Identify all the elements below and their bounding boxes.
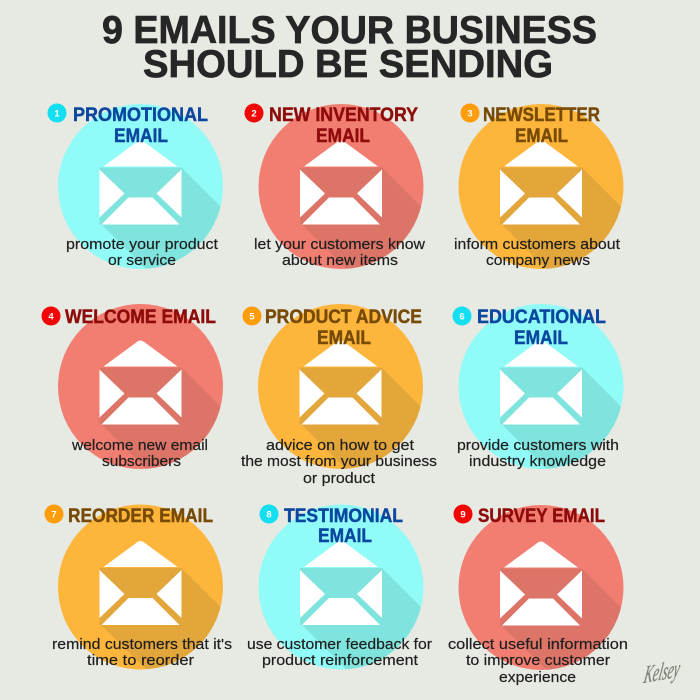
description <box>52 636 232 669</box>
badge 8 <box>260 504 278 524</box>
title: SHOULD BE SENDING <box>143 43 553 86</box>
icon: envelope on cyan circle <box>258 504 424 670</box>
description: inform customers about <box>454 236 621 253</box>
badge 3: 3 <box>467 108 473 120</box>
panel: newsletter email <box>454 104 624 269</box>
description: or service <box>108 252 176 269</box>
icon: envelope on orange circle <box>258 304 423 469</box>
badge 9 <box>454 504 472 524</box>
panel: testimonial email <box>248 504 432 670</box>
icon: envelope on red circle <box>458 505 624 670</box>
description <box>457 437 619 470</box>
icon: envelope on orange circle <box>458 104 624 269</box>
description: subscribers <box>102 453 181 470</box>
panel: educational email <box>452 304 624 470</box>
badge 9: 9 <box>460 510 466 520</box>
heading: NEW INVENTORY <box>269 104 418 126</box>
description: experience <box>499 669 576 686</box>
heading: EMAIL <box>515 125 568 147</box>
description <box>71 437 208 470</box>
description: product reinforcement <box>262 652 419 669</box>
description: company news <box>486 252 590 269</box>
description: collect useful information <box>448 636 628 653</box>
description: promote your product <box>66 236 219 253</box>
heading: EMAIL <box>317 327 371 349</box>
badge 5: 5 <box>249 312 255 322</box>
panel: reorder email <box>44 504 232 670</box>
heading: WELCOME EMAIL <box>65 306 216 328</box>
heading <box>73 104 208 147</box>
description: let your customers know <box>254 236 425 253</box>
icon: envelope on cyan circle <box>458 304 624 469</box>
description: industry knowledge <box>469 453 606 470</box>
description <box>254 236 425 269</box>
title <box>102 9 597 86</box>
description: about new items <box>282 252 398 269</box>
badge 8: 8 <box>266 510 272 520</box>
heading: REORDER EMAIL <box>68 505 213 527</box>
heading: EDUCATIONAL <box>477 306 606 328</box>
heading: EMAIL <box>114 125 168 147</box>
description: to improve customer <box>466 652 610 669</box>
heading <box>477 306 606 349</box>
heading: PROMOTIONAL <box>73 104 208 126</box>
badge 1: 1 <box>54 108 60 120</box>
icon: envelope on red circle <box>258 104 424 269</box>
badge 2: 2 <box>251 108 257 120</box>
heading: EMAIL <box>316 125 370 147</box>
description: remind customers that it's <box>52 636 232 653</box>
heading: EMAIL <box>514 327 568 349</box>
heading: TESTIMONIAL <box>284 505 403 527</box>
heading: SURVEY EMAIL <box>478 505 605 527</box>
badge 4: 4 <box>48 312 54 322</box>
badge 7 <box>44 504 64 524</box>
title: 9 EMAILS YOUR BUSINESS <box>102 9 597 52</box>
heading: NEWSLETTER <box>483 104 600 126</box>
icon: envelope on orange circle <box>58 504 223 670</box>
badge 5 <box>242 306 262 326</box>
badge 4 <box>42 306 60 326</box>
panel: product advice email <box>241 304 436 486</box>
description: or product <box>303 470 376 487</box>
heading <box>483 104 600 147</box>
badge 2 <box>244 104 264 122</box>
description <box>247 636 432 669</box>
description <box>241 437 437 487</box>
panel: promotional email <box>48 104 223 269</box>
heading: EMAIL <box>318 525 372 547</box>
heading: PRODUCT ADVICE <box>265 306 422 328</box>
description <box>454 236 621 269</box>
panel: survey email <box>448 504 627 686</box>
panel: new inventory email <box>244 104 426 269</box>
description: time to reorder <box>87 652 194 669</box>
badge 7: 7 <box>51 510 57 520</box>
description <box>448 636 628 686</box>
description <box>66 236 219 269</box>
description: provide customers with <box>457 437 619 454</box>
description: welcome new email <box>71 437 208 454</box>
badge 6: 6 <box>459 312 465 322</box>
badge 6 <box>452 306 472 326</box>
description: advice on how to get <box>266 437 415 454</box>
description: the most from your business <box>241 453 437 470</box>
heading <box>265 306 422 349</box>
description: use customer feedback for <box>247 636 432 653</box>
icon: envelope on cyan circle <box>58 104 223 269</box>
icon: envelope on red circle <box>58 304 223 469</box>
badge 1 <box>48 104 66 122</box>
panel: welcome email <box>42 304 223 469</box>
heading <box>269 104 418 147</box>
badge 3 <box>460 104 480 122</box>
heading <box>284 505 403 547</box>
